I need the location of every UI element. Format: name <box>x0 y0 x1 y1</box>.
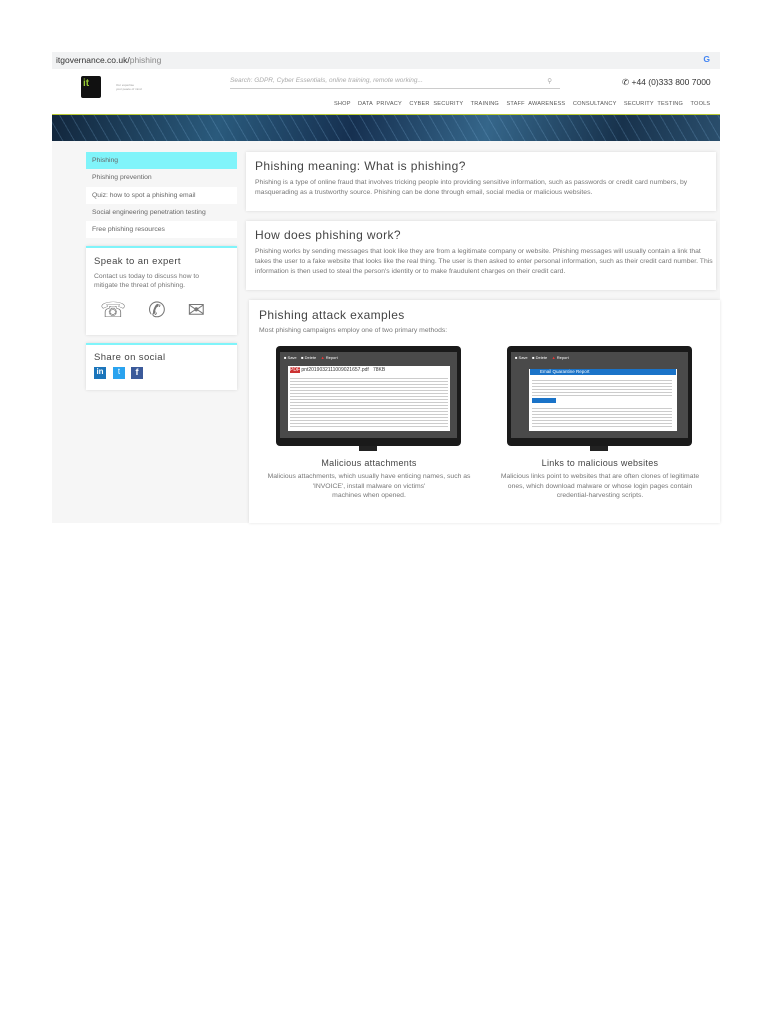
panel: how does phishing work <box>246 221 716 290</box>
sidebar nav: Phishing prevention <box>92 174 152 181</box>
phone: ✆ +44 (0)333 800 7000 <box>622 77 711 87</box>
logo <box>81 76 101 98</box>
panel: share on social <box>86 343 237 390</box>
browser bar <box>52 52 720 69</box>
panel: share on social: Share on social <box>94 352 165 363</box>
caption: malicious attachments: machines when opened. <box>332 492 406 499</box>
monitor: attachment: PDF pnt2019032111009021657.pdf 78KB <box>290 367 385 373</box>
search <box>230 77 560 89</box>
panel: speak to an expert: Contact us today to discuss how to mitigate the threat of phishing. <box>94 273 199 289</box>
monitor: attachment: ■ Save ■ Delete ▲ Report <box>284 355 338 360</box>
content background <box>52 141 720 523</box>
panel: phishing attack examples: Phishing attack examples <box>259 308 405 322</box>
logo: it <box>83 78 89 89</box>
monitor: attachment <box>276 346 461 451</box>
browser bar: G <box>703 54 710 64</box>
sidebar nav <box>86 152 237 238</box>
panel: speak to an expert: Speak to an expert <box>94 256 181 267</box>
search: Search: GDPR, Cyber Essentials, online training, remote working... <box>230 77 423 84</box>
social icons <box>94 367 143 379</box>
panel: speak to an expert <box>86 246 237 335</box>
caption: malicious attachments: Malicious attachments, which usually have enticing names, such as 'INVOICE', install malware on victims' <box>268 473 470 490</box>
header: your peace of mind <box>116 87 142 91</box>
caption: links to malicious websites: Links to malicious websites <box>542 458 658 468</box>
sidebar nav: Phishing <box>92 157 118 164</box>
sidebar nav: Social engineering penetration testing <box>92 209 206 216</box>
panel: phishing attack examples <box>249 300 720 523</box>
header <box>81 76 711 107</box>
caption: malicious attachments <box>268 458 470 499</box>
monitor: links <box>507 346 692 451</box>
sidebar nav: Quiz: how to spot a phishing email <box>92 192 196 199</box>
panel: what is phishing <box>246 152 716 211</box>
social icons: f <box>136 367 138 377</box>
monitor: links: Email Quarantine Report <box>540 369 590 374</box>
icons: ☏ ✆ ✉ <box>100 299 205 322</box>
panel: what is phishing: Phishing is a type of online fraud that involves tricking people into providing sensitive information, such as passwords or credit card numbers, by masquerading as a trustworthy source. Phishing can be done through email, social media or malicious websites. <box>255 179 687 196</box>
caption: malicious attachments: Malicious attachments <box>321 458 417 468</box>
social icons: t <box>118 367 120 376</box>
social icons: in <box>96 367 104 376</box>
monitor: links: ■ Save ■ Delete ▲ Report <box>515 355 569 360</box>
panel: how does phishing work: How does phishing work? <box>255 228 401 242</box>
panel: phishing attack examples: Most phishing campaigns employ one of two primary methods: <box>259 327 447 334</box>
panel: how does phishing work: Phishing works by sending messages that look like they are from a legitimate company or website. Phishing messages will usually contain a link that takes the user to a fake website that looks like the real thing. The user is then asked to enter personal information, such as their credit card number. This information is then used to steal the person's identity or to make fraudulent charges on their credit card. <box>255 248 713 275</box>
header: Our expertise <box>116 83 134 87</box>
nav: SHOP DATA PRIVACY CYBER SECURITY TRAINING STAFF AWARENESS CONSULTANCY SECURITY TESTING TOOLS <box>334 101 710 107</box>
caption: links to malicious websites: Malicious links point to websites that are often clones of legitimate ones, which download malware or whose login pages contain credential-harvesting scripts. <box>501 473 699 499</box>
caption: links to malicious websites <box>501 458 699 499</box>
panel: what is phishing: Phishing meaning: What is phishing? <box>255 159 466 173</box>
browser bar: itgovernance.co.uk/phishing <box>56 55 161 65</box>
search: ⚲ <box>547 78 552 85</box>
banner <box>52 114 720 141</box>
sidebar nav: Free phishing resources <box>92 226 165 233</box>
